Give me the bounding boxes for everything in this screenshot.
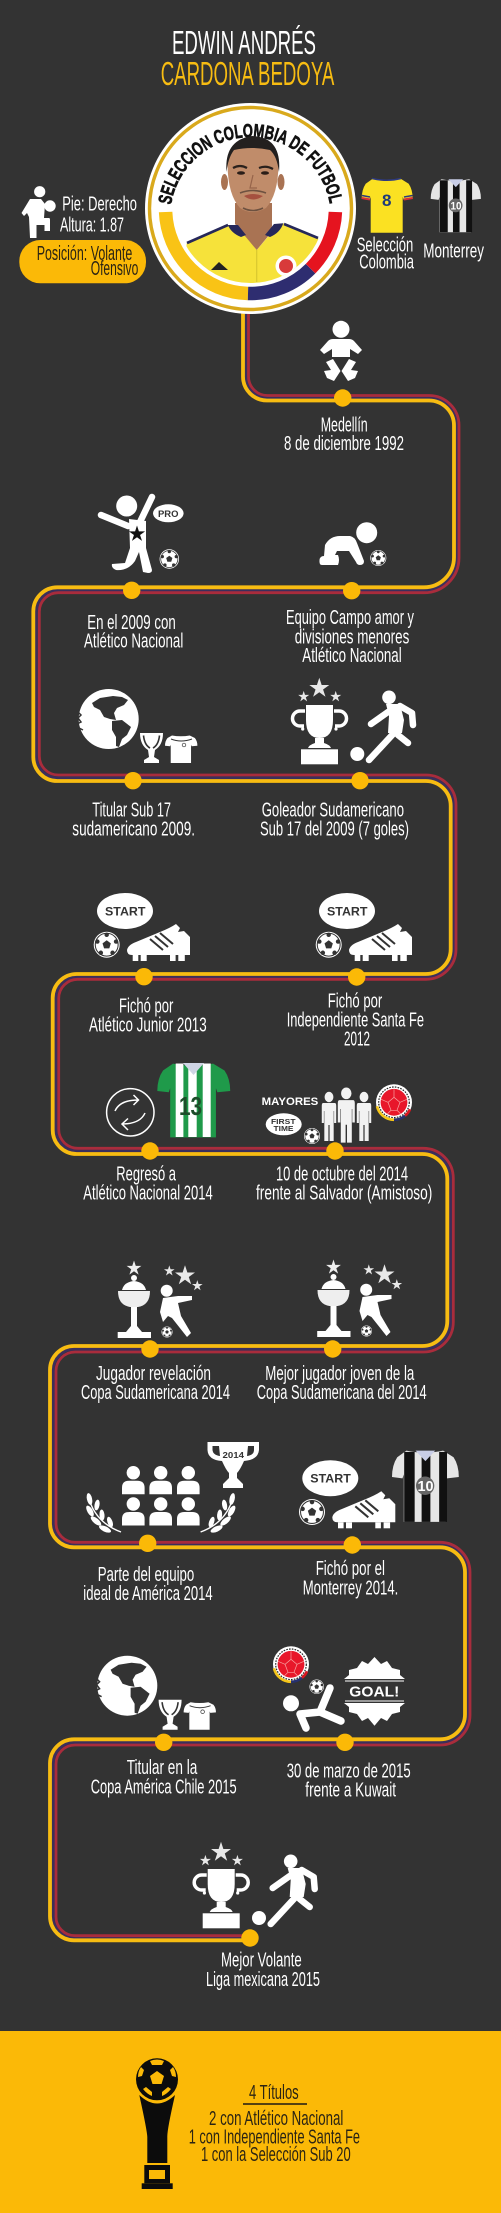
foot and height: Altura: 1.87: [60, 214, 124, 237]
icon: crawling baby: [319, 522, 386, 566]
icon: cup and player (revelación): [118, 1260, 203, 1338]
caption: Jugador revelación: [81, 1362, 230, 1404]
titles list: 1 con Independiente Santa Fe: [189, 2125, 360, 2148]
caption: Titular Sub 17: sudamericano 2009.: [72, 818, 195, 841]
icon: start, boot and Monterrey shirt: [299, 1451, 459, 1528]
icon: trophy and striker (mejor volante): [194, 1842, 315, 1928]
icon: start, ball and boot (Santa Fe): START: [327, 904, 368, 918]
caption: 30 de marzo: frente a Kuwait: [305, 1779, 396, 1802]
icon: start, ball and boot (Junior): START: [105, 904, 146, 918]
timeline dots: [123, 389, 369, 1947]
caption: Fichó por el Monterrey: Monterrey 2014.: [303, 1576, 398, 1599]
icon: ball trophy: [136, 2058, 178, 2189]
player portrait badge: [145, 103, 356, 314]
title: [161, 24, 334, 92]
foot and height: Pie: Derecho: [62, 193, 137, 216]
caption: Mejor Volante: Mejor Volante: [221, 1949, 302, 1972]
icon: Colombia badge, bicycle kick and goal burst: GOAL!: [349, 1684, 399, 1701]
icon: start, ball and boot (Santa Fe): [316, 893, 412, 961]
caption: Santa Fe: 2012: [344, 1028, 370, 1051]
icon: mayores first time: [262, 1084, 412, 1144]
icon: trophy and striker: [293, 678, 413, 764]
caption: Titular en la Copa América: Copa América Chile 2015: [91, 1775, 237, 1798]
icon: globe, trophy and shirt (Copa América): [96, 1656, 216, 1730]
label: Selección Colombia: [357, 234, 414, 273]
icon: Colombia badge, bicycle kick and goal burst: [273, 1646, 405, 1728]
icon: Monterrey shirt: 10: [450, 200, 462, 212]
icon: Colombia shirt: 8: [382, 191, 392, 210]
icon: mayores first time: TIME: [274, 1124, 294, 1133]
caption: Equipo Campo amor: [286, 606, 414, 667]
caption: Santa Fe: [287, 990, 424, 1051]
icon: baby: [320, 321, 362, 381]
icon: mayores first time: MAYORES: [262, 1096, 318, 1108]
caption: Parte del equipo: ideal de América 2014: [83, 1582, 213, 1605]
caption: Fichó por el Monterrey: [303, 1557, 398, 1599]
curved text: [171, 137, 330, 205]
foot and height: [60, 193, 137, 237]
caption: Titular Sub 17: [72, 799, 195, 841]
caption: Medellín: [284, 414, 404, 455]
caption: Equipo Campo amor: divisiones menores: [295, 625, 409, 648]
caption: 30 de marzo: [287, 1760, 411, 1802]
icon: mayores first time: FIRST: [271, 1117, 296, 1126]
caption: Goleador Sudamericano: Sub 17 del 2009 (7 goles): [260, 818, 409, 841]
icon: cup and player (joven): [317, 1260, 402, 1337]
position pill: [19, 240, 146, 283]
caption: Goleador Sudamericano: Goleador Sudamericano: [262, 799, 404, 822]
caption: Junior: [89, 994, 207, 1037]
badge arc: blue: [248, 269, 311, 294]
icon: start, boot and Monterrey shirt: 10: [418, 1478, 434, 1495]
badge arc: red: [311, 212, 335, 269]
timeline line: [33, 310, 470, 1940]
icon: pro player: PRO: [158, 509, 178, 520]
title: EDWIN ANDRÉS: [172, 24, 316, 61]
icon: start, ball and boot (Junior): [94, 893, 190, 961]
caption: Titular Sub 17: Titular Sub 17: [92, 799, 171, 822]
caption: 10 de octubre: [256, 1163, 432, 1205]
caption: Titular en la Copa América: [91, 1756, 237, 1798]
caption: Equipo Campo amor: Atlético Nacional: [302, 644, 402, 667]
caption: Junior: Atlético Junior 2013: [89, 1014, 207, 1037]
icon: return arrows: [107, 1089, 154, 1136]
title: CARDONA BEDOYA: [161, 55, 334, 92]
icon: ideal team with laurels and trophy: [85, 1442, 259, 1534]
caption: Jugador revelación: Jugador revelación: [96, 1362, 211, 1385]
caption: Junior: Fichó por: [119, 994, 173, 1017]
caption: Parte del equipo: [83, 1563, 213, 1605]
badge lettering: SELECCION COLOMBIA DE FUTBOL: [158, 124, 342, 204]
caption: Mejor jugador joven: [257, 1362, 427, 1404]
caption: Mejor Volante: Liga mexicana 2015: [206, 1968, 320, 1991]
caption: Equipo Campo amor: Equipo Campo amor y: [286, 606, 414, 629]
player photo: [186, 136, 318, 283]
panel: titles footer: [0, 2031, 501, 2213]
label: Selección Colombia: Colombia: [359, 250, 414, 273]
caption: Titular en la Copa América: Titular en la: [127, 1756, 198, 1779]
icon: globe, trophy and shirt: [77, 689, 197, 763]
caption: Goleador Sudamericano: [260, 799, 409, 841]
label: Selección Colombia: Selección: [357, 234, 413, 257]
caption: En el 2009: Atlético Nacional: [84, 630, 183, 653]
heading: 4 títulos: 4 Títulos: [249, 2081, 299, 2104]
position pill: Ofensivo: [91, 257, 138, 280]
caption: Santa Fe: Fichó por: [328, 990, 382, 1013]
caption: Medellín: 8 de diciembre 1992: [284, 432, 404, 455]
badge arc: yellow: [166, 212, 248, 294]
caption: Medellín: Medellín: [321, 414, 368, 437]
icon: ideal team with laurels and trophy: 2014: [222, 1450, 244, 1460]
icon: green shirt: 13: [179, 1091, 202, 1121]
caption: 30 de marzo: 30 de marzo de 2015: [287, 1760, 411, 1783]
titles list: 2 con Atlético Nacional: [209, 2107, 343, 2130]
titles list: 1 con la Selección Sub 20: [201, 2143, 351, 2166]
caption: En el 2009: En el 2009 con: [87, 611, 176, 634]
caption: Regresó: Regresó a: [116, 1163, 176, 1186]
icon: Monterrey shirt: [431, 179, 481, 232]
caption: Santa Fe: Independiente Santa Fe: [287, 1009, 424, 1032]
icon: green shirt: [157, 1063, 230, 1137]
icon: start, boot and Monterrey shirt: START: [310, 1472, 351, 1486]
caption: Fichó por el Monterrey: Fichó por el: [316, 1557, 385, 1580]
caption: Mejor Volante: [206, 1949, 320, 1991]
caption: 10 de octubre: 10 de octubre del 2014: [276, 1163, 408, 1186]
caption: Parte del equipo: Parte del equipo: [98, 1563, 194, 1586]
titles list: [189, 2107, 360, 2166]
caption: Mejor jugador joven: Mejor jugador joven de la: [265, 1362, 415, 1385]
caption: En el 2009: [84, 611, 183, 653]
caption: Jugador revelación: Copa Sudamericana 2014: [81, 1381, 230, 1404]
icon: Colombia shirt: [362, 178, 413, 233]
icon: pro player: [101, 496, 184, 573]
position pill: Posición: Volante: [37, 242, 132, 265]
icon: player with ball: [22, 186, 56, 238]
caption: Regresó: [83, 1163, 213, 1205]
caption: Regresó: Atlético Nacional 2014: [83, 1182, 213, 1205]
